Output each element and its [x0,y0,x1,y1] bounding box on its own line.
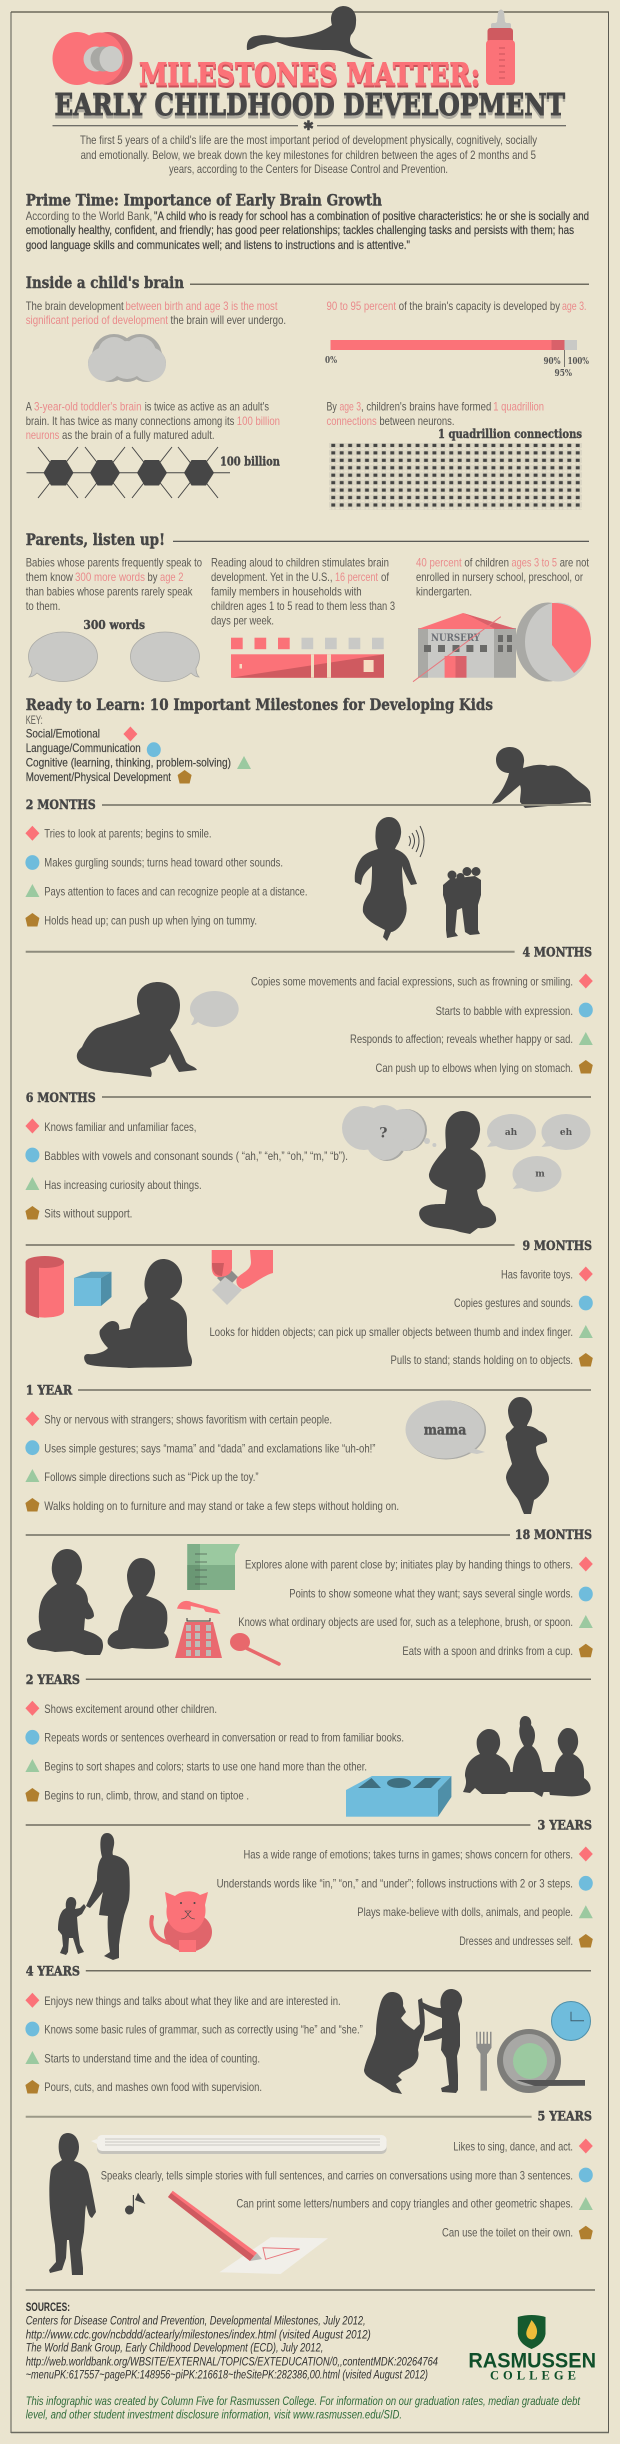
icon: paper with triangle [219,2237,328,2274]
icon: mother and child high five [364,1989,462,2094]
milestones list: Copies gestures and sounds. [454,1296,573,1310]
milestones list [25,1701,404,1802]
icon: fingers picking up block [212,1250,273,1305]
disclosure note: level, and other student investment disclosure information, visit www.rasmussen.edu/SID. [26,2408,402,2422]
milestones list: Can push up to elbows when lying on stomach. [376,1061,573,1075]
text: reading aloud [211,556,395,628]
icon: fork [476,2032,492,2091]
text: 1 quadrillion: connections [326,414,377,428]
milestones list: Likes to sing, dance, and act. [453,2139,573,2153]
panel: 3 years [26,1818,593,1960]
icon: baby with sound waves [355,817,424,941]
text: reading aloud: of [381,570,390,584]
heading: 1 year: 1 YEAR [26,1383,72,1398]
milestones list: Eats with a spoon and drinks from a cup. [402,1644,573,1658]
icon: babble speech bubbles: m [535,1170,545,1180]
milestones list: Begins to sort shapes and colors; starts to use one hand more than the other. [44,1760,367,1774]
text: world bank quote: According to the World Bank, [26,209,152,223]
diagram: 100 billion neurons: 100 billion [220,454,280,469]
icon: speech bar [91,2135,387,2154]
milestones list: Starts to babble with expression. [436,1004,573,1018]
icon: standing boy [49,2133,96,2275]
text: 90 to 95 percent [326,299,586,313]
text: 1 quadrillion [326,400,544,428]
icon: music note [125,2193,146,2214]
icon: babble speech bubbles [487,1114,590,1192]
sources text [26,2300,438,2382]
legend key: KEY: [26,713,43,727]
milestones list: Knows familiar and unfamiliar faces, [44,1120,196,1134]
text: 300 more words: them know [26,570,73,584]
text: 300 more words [26,556,202,613]
heading: parents, listen up: Parents, listen up! [26,530,165,549]
icon: seated baby [419,1111,496,1234]
legend key: Social/Emotional [26,727,100,741]
milestones list: Repeats words or sentences overheard in conversation or read to from familiar books. [44,1731,404,1745]
heading: 5 years: 5 YEARS [538,2110,592,2125]
bar chart: brain capacity: 100% [568,357,589,367]
text: 40 percent not enrolled: 40 percent [416,556,462,570]
panel: 1 year [25,1383,591,1514]
chart: 300 words speech bubbles: 300 words [83,617,145,632]
text: 3-year-old brain [26,400,280,442]
milestones list: Has increasing curiosity about things. [44,1178,202,1192]
title [54,57,566,126]
icon: blue cube [74,1272,112,1306]
text: reading aloud: family members in households with [211,584,362,598]
icon: telephone [175,1602,222,1658]
text: 40 percent not enrolled [416,556,590,598]
text: 90 to 95 percent: of the brain's capacity is developed by [399,299,560,313]
bar chart: brain capacity [325,340,589,379]
panel: 18 months [26,1528,593,1664]
milestones list [25,826,308,927]
logo: Rasmussen College [468,2315,596,2382]
bar chart: brain capacity: 90% [544,357,561,367]
milestones list: Makes gurgling sounds; turns head toward other sounds. [44,856,283,870]
panel: 2 months [25,798,591,941]
sources text: ~menuPK:617557~pagePK:148956~piPK:216618~theSitePK:282386,00.html (visited August 2012) [26,2368,428,2382]
panel: 9 months [26,1239,593,1368]
heading: 9 months: 9 MONTHS [522,1239,592,1254]
text: most significant period: The brain development [26,299,124,313]
text: 300 more words: than babies whose parents rarely speak [26,584,193,598]
panel: parents, listen up [26,530,591,682]
text: reading aloud: days per week. [211,614,274,628]
text: most significant period: significant period of development [26,313,169,327]
icon: babble speech bubbles: eh [560,1128,573,1138]
text: 3-year-old brain: neurons [26,428,59,442]
icon: family silhouette [443,867,481,938]
panel: 4 years [25,1965,591,2094]
milestones list: Tries to look at parents; begins to smile. [44,827,211,841]
milestones list: Starts to understand time and the idea of counting. [44,2051,260,2065]
text: 3-year-old brain: brain. It has twice as many connections among its [26,414,234,428]
milestones list: Holds head up; can push up when lying on tummy. [44,913,257,927]
heading: inside a child's brain: Inside a child's brain [26,273,184,292]
header divider with asterisk: ✱ [303,118,314,133]
icon: spoon [230,1633,279,1664]
text: reading aloud: children ages 1 to 5 read to them less than 3 [211,599,395,613]
text: 300 more words: Babies whose parents frequently speak to [26,556,202,570]
chart: days per week squares and book [231,638,384,678]
milestones list [25,1118,348,1221]
intro paragraph [80,133,537,176]
bar chart: brain capacity: 0% [325,356,337,366]
text: 40 percent not enrolled: kindergarten. [416,584,472,598]
milestones list: Pays attention to faces and can recognize people at a distance. [44,885,308,899]
legend key: Language/Communication [26,741,141,755]
heading: 18 months: 18 MONTHS [515,1528,592,1543]
diagram: 100 billion neurons [26,447,280,498]
icon: shape sorter box [346,1776,451,1817]
milestones list [25,1993,363,2094]
text: 40 percent not enrolled: are not [560,556,590,570]
text: 1 quadrillion: 1 quadrillion [493,400,544,414]
intro paragraph: years, according to the Centers for Disease Control and Prevention. [169,162,448,176]
panel: prime time [26,191,589,252]
title: MILESTONES MATTER: [140,59,480,95]
milestones list: Enjoys new things and talks about what they like and are interested in. [44,1994,341,2008]
heading: 4 months: 4 MONTHS [522,946,592,961]
milestones list [238,1556,593,1658]
icon: nursery building [413,613,516,682]
icon: baby bottle [486,10,515,85]
milestones list: Shy or nervous with strangers; shows favoritism with certain people. [44,1412,332,1426]
diagram: 1 quadrillion connections: 1 quadrillion connections [438,426,582,441]
text: 3-year-old brain: as the brain of a fully matured adult. [62,428,215,442]
sources text: The World Bank Group, Early Childhood Development (ECD), July 2012, [26,2341,323,2355]
milestones list [251,974,593,1075]
text: world bank quote: good language skills and communicates well; and listens to instructions and is attentive." [26,238,410,252]
sources text: http://web.worldbank.org/WBSITE/EXTERNAL/TOPICS/EXTEDUCATION/0,,contentMDK:20264764 [26,2354,438,2368]
heading: prime time: Prime Time: Importance of Early Brain Growth [26,191,382,210]
chart: 300 words speech bubbles [28,617,200,682]
milestones list: Uses simple gestures; says “mama” and “dada” and exclamations like “uh-oh!” [44,1441,376,1455]
text: most significant period: the brain will ever undergo. [170,313,286,327]
panel: ready to learn key [26,695,591,808]
icon: mama speech bubble: mama [424,1422,466,1438]
icon: babble speech bubbles: ah [505,1128,518,1138]
text: 300 more words: age 2 [160,570,184,584]
milestones list: Pulls to stand; stands holding on to objects. [390,1353,573,1367]
text: 1 quadrillion: age 3 [340,400,361,414]
text: 3-year-old brain: 100 billion [237,414,280,428]
icon: red cylinder [26,1256,64,1318]
icon: clock [552,2002,590,2040]
icon: toddler [506,1397,549,1514]
logo: Rasmussen College: COLLEGE [490,2368,576,2382]
text: most significant period [26,299,286,327]
panel: 4 months [26,946,593,1077]
milestones list [217,1846,593,1948]
text: reading aloud: 16 percent [335,570,378,584]
icon: mama speech bubble [406,1400,486,1460]
panel: inside a child's brain [26,273,589,510]
icon: pie chart 40 percent [516,602,591,682]
milestones list: Pours, cuts, and mashes own food with supervision. [44,2080,262,2094]
diagram: 1 quadrillion connections [329,426,582,510]
text: reading aloud: Reading aloud to children stimulates brain [211,556,389,570]
text: 40 percent not enrolled: of children [464,556,509,570]
text: 1 quadrillion: By [326,400,337,414]
heading: 4 years: 4 YEARS [26,1965,80,1980]
milestones list: Can use the toilet on their own. [442,2226,573,2240]
icon: brain cloud [88,334,166,382]
icon: speech bubble [190,991,239,1027]
text: 3-year-old brain: A [26,400,32,414]
icon: pacifier [52,32,132,85]
legend key [26,713,251,784]
icon: plate with food and knife [497,2029,585,2093]
icon: three seated children [463,1716,591,1797]
milestones list: Sits without support. [44,1207,132,1221]
heading: 3 years: 3 YEARS [538,1818,592,1833]
bar chart: brain capacity: 95% [554,369,572,379]
icon: pencil [168,2191,262,2261]
icon: thought bubble: ? [379,1126,388,1142]
icon: baby pushing up [77,982,197,1077]
milestones list: Has favorite toys. [501,1267,573,1281]
icon: nursery building: NURSERY [431,632,480,644]
logo: Rasmussen College: RASMUSSEN [468,2350,596,2373]
text: 90 to 95 percent: age 3. [562,299,586,313]
panel: 6 months [25,1091,591,1234]
text: 3-year-old brain: is twice as active as an adult's [145,400,269,414]
milestones list: Shows excitement around other children. [44,1702,217,1716]
text: most significant period: between birth and age 3 is the most [126,299,278,313]
legend key: Cognitive (learning, thinking, problem-solving) [26,756,231,770]
milestones list: Knows some basic rules of grammar, such as correctly using “he” and “she.” [44,2023,363,2037]
icon: two seated children [27,1549,169,1655]
sources text: Centers for Disease Control and Prevention, Developmental Milestones, July 2012, [26,2314,366,2328]
milestones list: Walks holding on to furniture and may stand or take a few steps without holding on. [44,1499,399,1513]
icon: seated baby with toy [84,1259,192,1368]
heading: 2 years: 2 YEARS [26,1673,80,1688]
heading: 2 months: 2 MONTHS [26,798,96,813]
header [52,6,566,176]
text: 1 quadrillion: between neurons. [379,414,454,428]
text: 3-year-old brain: 3-year-old toddler's brain [34,400,142,414]
icon: baby lying on tummy [247,6,373,59]
milestones list: Dresses and undresses self. [459,1934,573,1948]
legend key: Movement/Physical Development [26,770,172,784]
text: 300 more words: by [148,570,158,584]
text: 300 more words: 300 more words [75,570,145,584]
text: 300 more words: to them. [26,599,60,613]
icon: mother holding child's hand [58,1833,130,1960]
icon: cat [151,1891,212,1952]
text: 1 quadrillion: , children's brains have formed [361,400,491,414]
sources text: SOURCES: [26,2300,70,2314]
text: world bank quote [26,209,589,252]
text: reading aloud: development. Yet in the U.S., [211,570,332,584]
text: 90 to 95 percent: 90 to 95 percent [326,299,397,313]
panel: 2 years [25,1673,591,1817]
icon: crawling baby [492,747,591,808]
milestones list [101,2138,593,2240]
milestones list: Begins to run, climb, throw, and stand on tiptoe . [44,1788,249,1802]
panel: 5 years [26,2110,593,2275]
icon: thought bubble [342,1105,436,1161]
heading: ready to learn: Ready to Learn: 10 Important Milestones for Developing Kids [26,695,493,714]
sources text: http://www.cdc.gov/ncbddd/actearly/milestones/index.html (visited August 2012) [26,2327,371,2341]
milestones list: Babbles with vowels and consonant sounds ( “ah,” “eh,” “oh,” “m,” “b”). [44,1149,348,1163]
text: 40 percent not enrolled: ages 3 to 5 [512,556,557,570]
icon: measuring cup [187,1544,240,1590]
milestones list [25,1411,399,1513]
milestones list [210,1266,593,1367]
title: MILESTONES MATTER: [139,57,480,93]
panel: sources and footer [26,2290,596,2422]
disclosure note [26,2394,581,2422]
milestones list: Follows simple directions such as “Pick up the toy.” [44,1470,259,1484]
heading: 6 months: 6 MONTHS [26,1091,96,1106]
